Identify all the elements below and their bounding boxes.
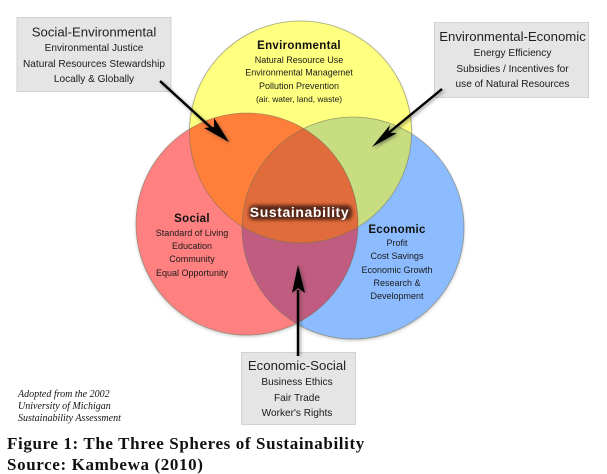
text: social: Education bbox=[172, 241, 212, 251]
attribution note: Adopted from the 2002 bbox=[17, 389, 110, 400]
arrow: environmental-economic bbox=[372, 89, 444, 148]
callout: environmental-economic bbox=[434, 22, 588, 98]
figure caption: Source: Kambewa (2010) bbox=[7, 455, 204, 474]
circle: economic bbox=[242, 117, 464, 339]
callout: social-environmental: Environmental Justice bbox=[45, 43, 144, 54]
text: economic: Economic bbox=[368, 224, 426, 236]
callout: social-environmental: Locally & Globally bbox=[54, 74, 135, 85]
overlap: social-environmental bbox=[190, 113, 304, 226]
callout: economic-social: Worker's Rights bbox=[262, 408, 332, 419]
callout: social-environmental: Natural Resources Stewardship bbox=[23, 59, 165, 70]
text: social: Community bbox=[169, 254, 215, 264]
overlap: economic-social bbox=[242, 129, 358, 323]
circle shadows bbox=[136, 22, 464, 340]
attribution note: Sustainability Assessment bbox=[18, 413, 121, 424]
callout: social-environmental bbox=[17, 18, 171, 92]
text: social: Standard of Living bbox=[156, 228, 228, 238]
text: economic: Development bbox=[370, 291, 424, 301]
circle: social bbox=[136, 113, 358, 335]
callout: economic-social bbox=[242, 352, 356, 424]
callout: environmental-economic: Energy Efficiency bbox=[474, 48, 552, 59]
text: environmental: Environmental Managemet bbox=[245, 68, 353, 78]
figure caption bbox=[7, 434, 365, 474]
text: environmental: Natural Resource Use bbox=[255, 55, 343, 65]
text: economic bbox=[361, 224, 433, 301]
label: sustainability: Sustainability bbox=[250, 204, 349, 220]
circle outlines bbox=[136, 21, 464, 339]
text: economic: Economic Growth bbox=[361, 265, 433, 275]
text: economic: Research & bbox=[373, 278, 421, 288]
text: social bbox=[156, 213, 229, 278]
overlap: environmental-economic bbox=[304, 117, 412, 227]
text: environmental: Environmental bbox=[257, 40, 341, 52]
overlap: sustainability bbox=[242, 129, 358, 243]
text: social: Social bbox=[174, 213, 210, 225]
text: economic: Profit bbox=[386, 238, 408, 248]
callout: social-environmental: Social-Environmental bbox=[32, 24, 156, 40]
callout: economic-social: Business Ethics bbox=[261, 377, 333, 388]
text: economic: Cost Savings bbox=[370, 251, 424, 261]
callout: environmental-economic: Subsidies / Incentives for bbox=[456, 64, 569, 75]
text: environmental: Pollution Prevention bbox=[259, 81, 339, 91]
arrow: economic-social bbox=[292, 265, 306, 356]
text: environmental bbox=[245, 40, 353, 104]
text: social: Equal Opportunity bbox=[156, 268, 229, 278]
attribution note bbox=[17, 389, 121, 424]
circle: environmental bbox=[190, 21, 412, 243]
callout: economic-social: Fair Trade bbox=[274, 393, 320, 404]
callout: environmental-economic: Environmental-Economic bbox=[439, 29, 586, 44]
figure caption: Figure 1: The Three Spheres of Sustainability bbox=[7, 434, 365, 453]
attribution note: University of Michigan bbox=[18, 401, 111, 412]
venn diagram bbox=[136, 21, 464, 340]
text: environmental: (air. water, land, waste) bbox=[256, 94, 342, 104]
arrow: social-environmental bbox=[160, 81, 230, 144]
callout: environmental-economic: use of Natural Resources bbox=[456, 79, 569, 90]
callout: economic-social: Economic-Social bbox=[248, 358, 346, 373]
